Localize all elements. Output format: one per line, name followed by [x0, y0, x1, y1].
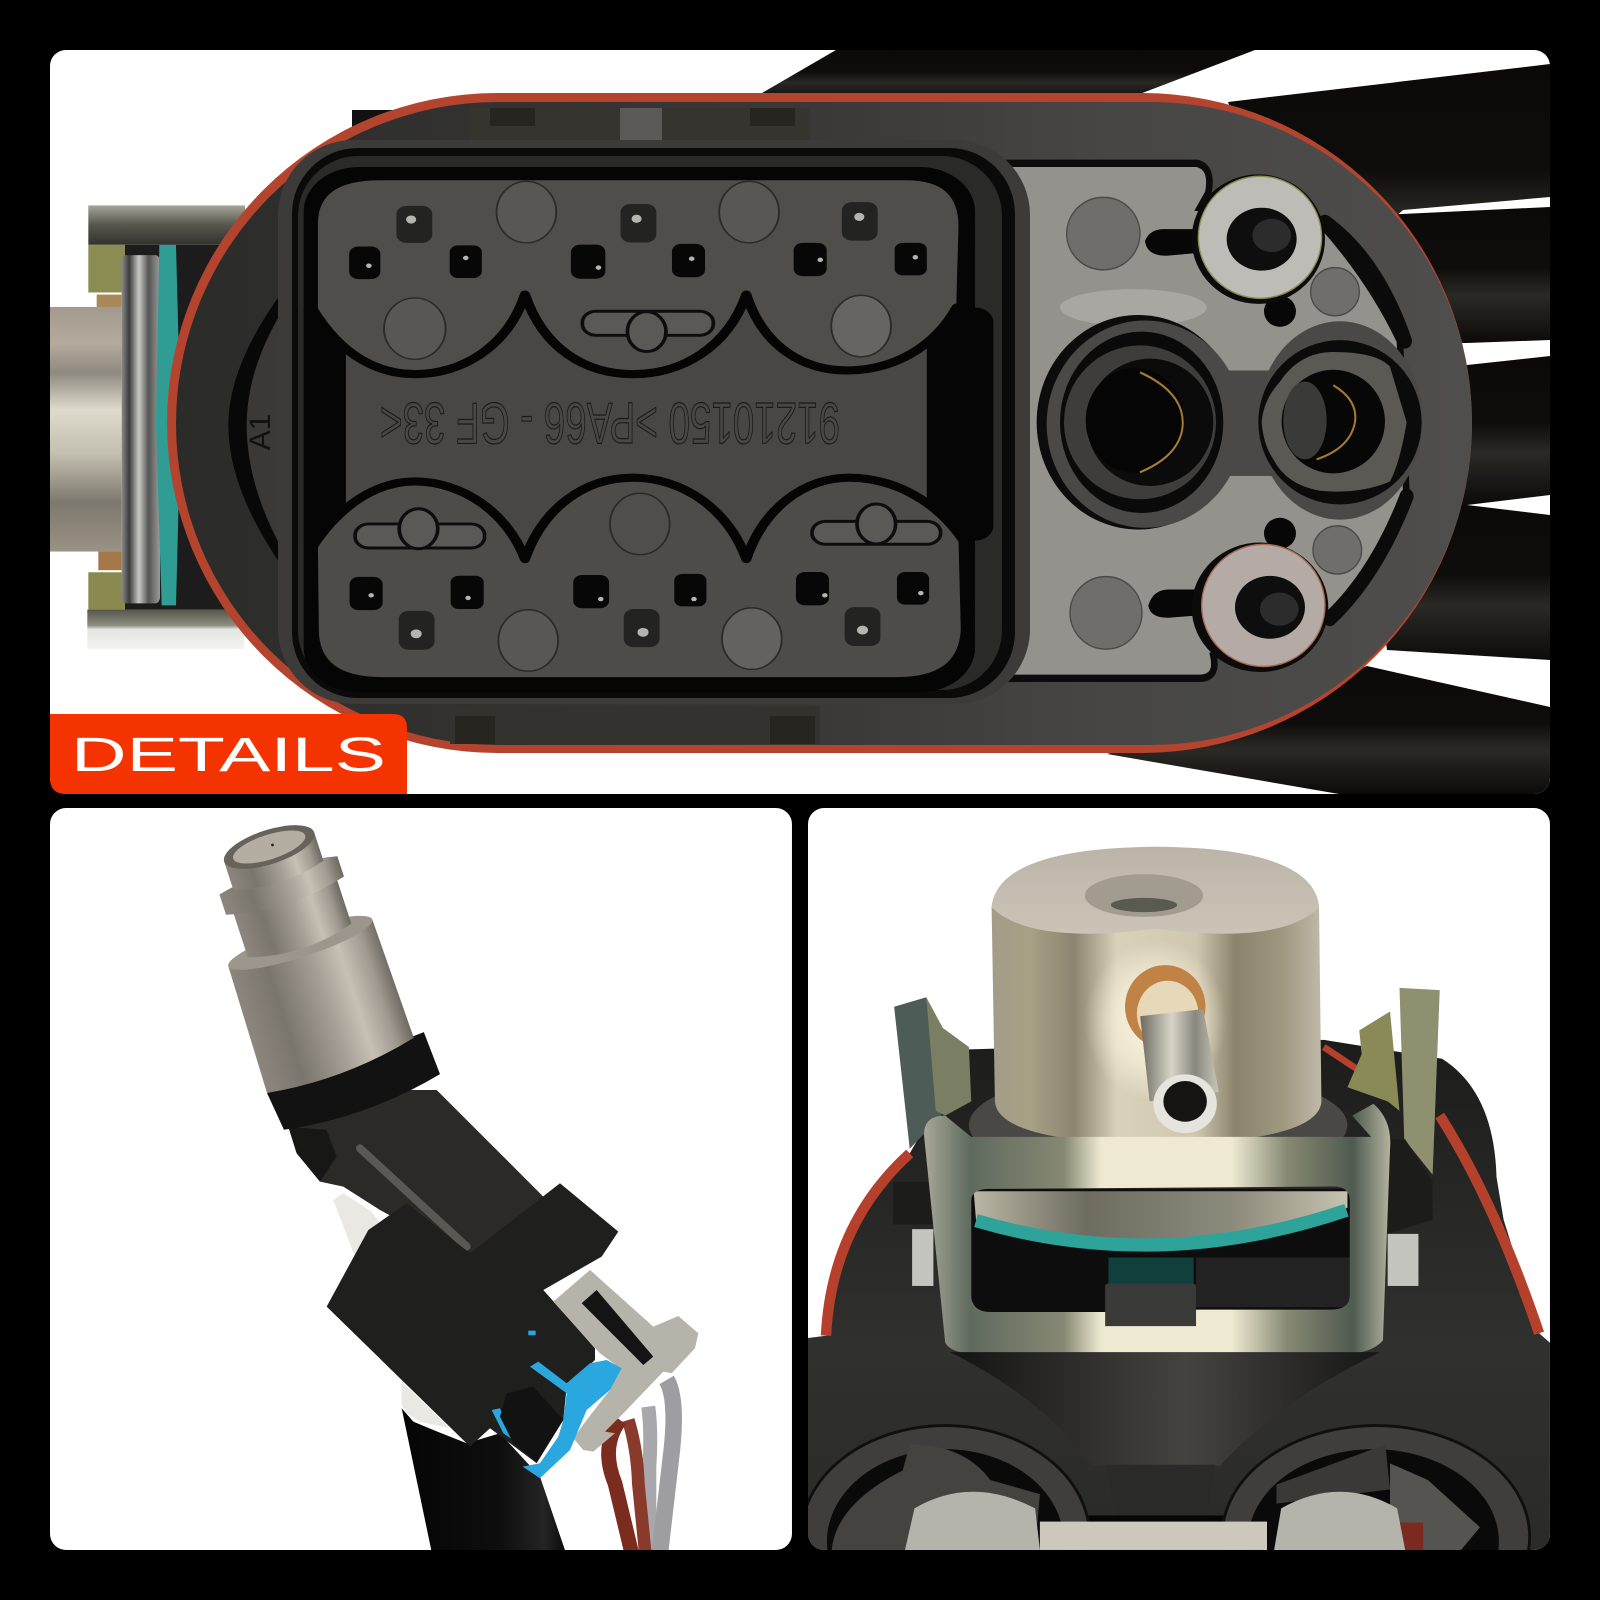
rear clip prongs: [894, 988, 1440, 1175]
panel: regulator photo: [801, 808, 1550, 1600]
badge: DETAILS: DETAILS: [71, 729, 386, 782]
neck: [233, 879, 354, 965]
wires: [609, 1380, 674, 1567]
brass pipe fitting: [1125, 965, 1219, 1133]
grey terminals: [396, 202, 880, 650]
hoses fanning out behind the housing: [750, 50, 1550, 794]
front metal clip: [924, 1104, 1390, 1355]
silver bottom plate: [1040, 1522, 1267, 1550]
metal nozzle: [190, 802, 443, 1137]
lighter plate patches: [1060, 289, 1207, 326]
connector plates with pins: [304, 167, 993, 692]
round ejector marks: [384, 181, 891, 671]
lower washer and screw: [1192, 543, 1328, 672]
upper washer and screw: [1192, 174, 1325, 304]
black hose: [402, 1408, 568, 1560]
right plate with ports and screws: [977, 163, 1423, 678]
regulator dome: [992, 847, 1321, 1145]
panel: injector photo: [50, 802, 792, 1567]
center block: [1106, 1465, 1215, 1515]
black latch: [500, 1387, 563, 1462]
curved black channels: [1325, 222, 1405, 341]
T-shaped keys: [355, 311, 941, 549]
injector connector assembly: [288, 1090, 698, 1567]
plate round marks: [1067, 197, 1362, 649]
nozzle tip: [224, 832, 326, 897]
bottom mounting tabs: [450, 706, 820, 744]
figure-eight port surround: [1229, 370, 1272, 476]
top port: [1085, 874, 1203, 917]
lower scalloped plate: [313, 478, 966, 681]
injector tube and metal retaining clip on the left: [50, 205, 253, 649]
large port: [1036, 315, 1214, 530]
terminal contacts: [366, 213, 924, 638]
dark regulator base: [969, 1068, 1347, 1182]
side black tabs: [893, 1139, 1433, 1234]
panel: top details photo: [50, 50, 1550, 794]
left socket: [801, 1426, 1090, 1600]
dark stub behind the gasket: [352, 110, 392, 127]
molded part number text: 91210150 >PA66 - GF 33<: [380, 390, 840, 455]
right socket: [1222, 1426, 1530, 1600]
black collar: [264, 1031, 443, 1137]
upper scalloped plate: [313, 176, 964, 374]
black notches near the screws: [1145, 229, 1194, 256]
flange: [217, 849, 346, 923]
red gasket outline: [167, 93, 1472, 753]
housing body: [176, 102, 1472, 745]
red gasket arcs: [826, 1047, 1539, 1336]
silver side pieces: [912, 1229, 1418, 1286]
lower body core: [950, 1352, 1381, 1466]
black connector shell: [327, 1183, 618, 1463]
black housing: [808, 1040, 1550, 1550]
light grey plate: [977, 163, 1407, 678]
white wire sleeve: [333, 1193, 450, 1428]
connector frame: [278, 140, 1030, 704]
clip window contents: [971, 1189, 1350, 1326]
top mounting tabs: [490, 108, 795, 140]
grey connector: [553, 1270, 698, 1452]
molded text A1: A1: [244, 414, 277, 450]
main cylinder: [223, 910, 417, 1097]
black terminals: [349, 243, 929, 610]
middle plate: [346, 308, 927, 546]
angled injector body: [288, 1090, 547, 1260]
badge: DETAILS: [50, 714, 407, 794]
small port: [1258, 340, 1422, 504]
bright reflection: [1085, 940, 1227, 1101]
molded A1 recess: [228, 298, 278, 560]
blue locking clip: [492, 1331, 622, 1478]
